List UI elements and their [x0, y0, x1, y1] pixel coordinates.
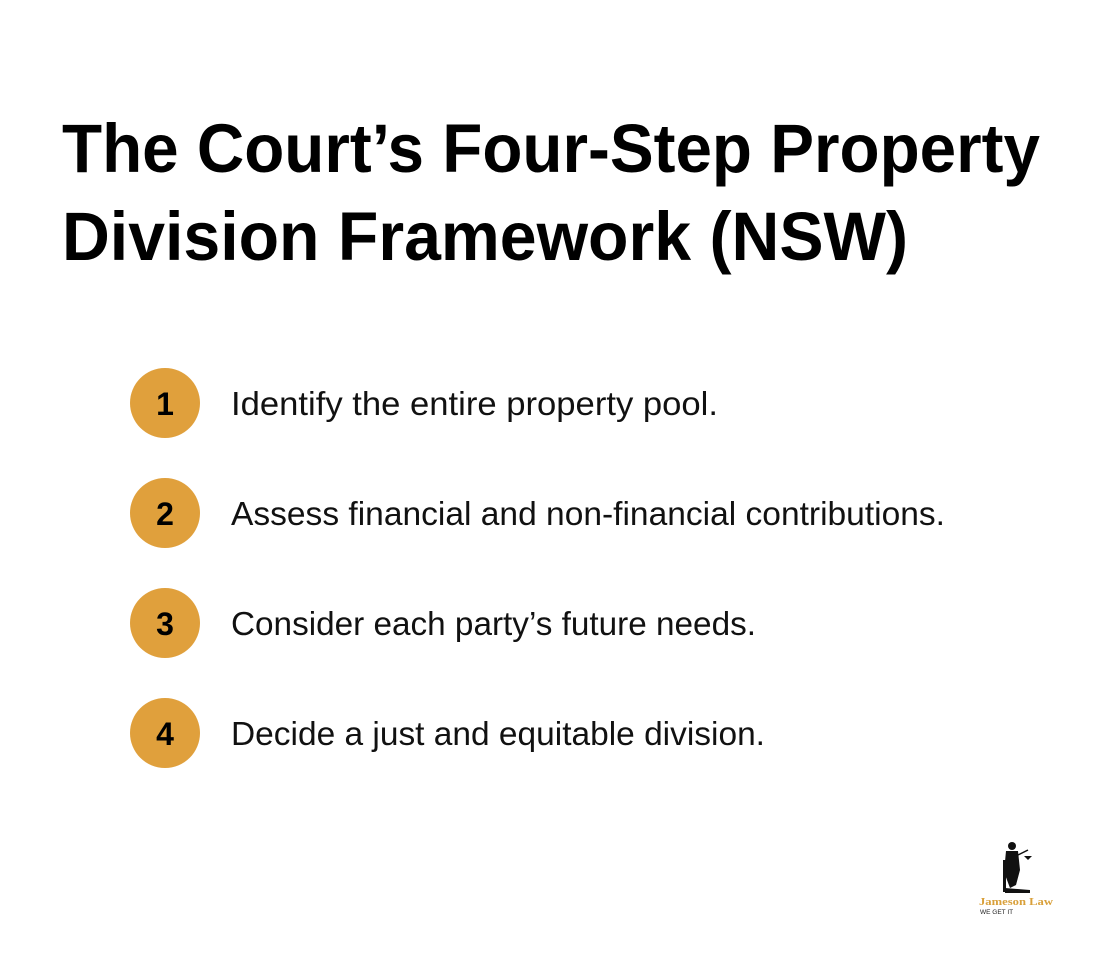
step 1: 1	[156, 386, 174, 422]
step 2: 2	[156, 496, 174, 532]
step 3: 3	[156, 606, 174, 642]
logo	[979, 842, 1053, 916]
step 3	[130, 588, 756, 658]
logo: WE GET IT	[980, 909, 1013, 916]
title: The Court’s Four-Step Property	[62, 110, 1040, 187]
step 1: Identify the entire property pool.	[231, 385, 718, 422]
step 4	[130, 698, 765, 768]
step 4: 4	[156, 716, 174, 752]
step 1	[130, 368, 718, 438]
step 3: Consider each party’s future needs.	[231, 605, 756, 642]
step 4: Decide a just and equitable division.	[231, 715, 765, 752]
step 2	[130, 478, 945, 548]
title: Division Framework (NSW)	[62, 198, 908, 275]
step 2: Assess financial and non-financial contributions.	[231, 495, 945, 532]
logo: Jameson Law	[979, 896, 1053, 908]
title	[62, 110, 1040, 275]
